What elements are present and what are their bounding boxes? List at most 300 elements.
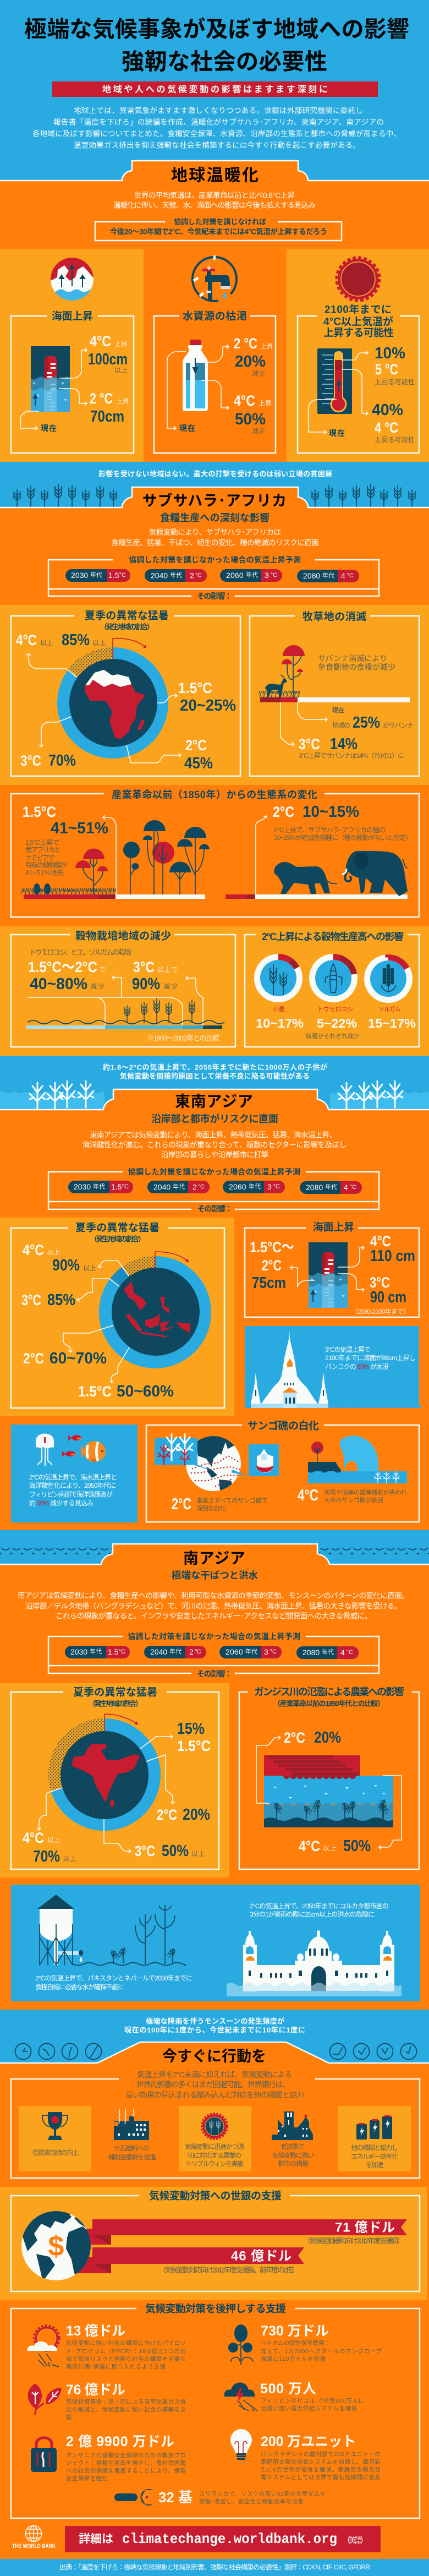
values: 以上 <box>83 1264 96 1272</box>
values <box>21 1242 174 1400</box>
chart: sea level <box>31 346 70 412</box>
item: 76 <box>28 2382 186 2421</box>
pill 2040: 2 °C <box>189 1647 201 1656</box>
values <box>299 706 414 760</box>
Africa intro text <box>111 527 319 547</box>
values: がサバンナ <box>383 721 414 729</box>
text: 世界的影響の多くはまだ回避可能。世界銀行は、 <box>136 2080 290 2089</box>
pill 2030: 1.5°C <box>108 1647 125 1656</box>
values: 以上 <box>63 1855 76 1863</box>
text: plants: 南アフリカと <box>25 845 61 854</box>
text <box>125 2070 304 2099</box>
section heading: Sub-Saharan Africa <box>0 487 429 523</box>
section heading: Southeast Asia <box>0 1089 429 1125</box>
panel: grain area reduction <box>11 929 235 1047</box>
text: 高い効果の見込まれる踏み込んだ対応を他の機関と協力 <box>125 2091 304 2099</box>
text: 2 degrees: 2°C <box>172 1496 191 1513</box>
heading: 牧草地の消滅 <box>302 610 366 623</box>
heading: 2°C上昇による穀物生産高への影響 <box>262 931 404 942</box>
values: 1.5°C <box>177 1738 211 1754</box>
pill 2040 <box>144 1646 206 1658</box>
labels: 10~17% <box>256 1016 304 1030</box>
values: 上回る可能性 <box>375 436 415 444</box>
text: 4 degrees: 大半のサンゴ礁が絶滅 <box>324 1496 383 1504</box>
link banner: （英語） <box>343 2536 368 2545</box>
card: carbon pricing <box>19 2106 91 2171</box>
values: 15% <box>177 1720 205 1738</box>
panel: fisheries <box>11 1425 138 1522</box>
labels: 小麦 <box>273 1006 285 1013</box>
pill 2060: 3 °C <box>267 1182 280 1191</box>
donut: corn <box>309 954 358 1002</box>
pill 2060: 3 °C <box>265 571 277 580</box>
text: フィリピン南部で海洋漁獲高が <box>29 1490 113 1498</box>
text <box>35 1902 389 1991</box>
values: 4°C <box>23 1242 44 1258</box>
values: 70% <box>48 752 76 769</box>
item: 76: 気候投資基金：途上国による温室効果ガス排 <box>66 2398 186 2405</box>
item: 76: 76 億ドル <box>66 2382 125 2398</box>
item: 730: 保護に110万ドルを投資 <box>261 2355 326 2362</box>
text: 食糧自給に必要な水が確保不能に <box>35 1983 124 1991</box>
leaders <box>39 1737 173 1851</box>
values: 70cm <box>90 408 124 425</box>
section heading: Sub-Saharan Africa: サブサハラ･アフリカ <box>142 492 287 509</box>
callout: malnutrition: 気候変動を間接的原因として栄養不良に陥る可能性がある <box>120 1072 310 1080</box>
item: 200: バングラデシュの農村部で200万ユニットの <box>261 2451 381 2458</box>
panel: Ganges flood <box>239 1686 419 1869</box>
callout: no action <box>95 218 342 241</box>
item: 500: 500 万人 <box>260 2381 316 2397</box>
chart: ring <box>99 1252 211 1368</box>
warming text: 世界の平均気温は、産業革命以前と比べ0.8°C上昇 <box>134 190 295 199</box>
text: 海洋酸性化により、2050年代に <box>29 1481 116 1489</box>
text: 2 degrees <box>172 1496 268 1513</box>
heading <box>73 1687 157 1707</box>
text: plants: ナミビアで <box>25 854 55 862</box>
pill 2060: 2060 年代 <box>226 1647 257 1656</box>
leaders <box>290 1248 364 1290</box>
callout: monsoon frequency: 極端な降雨を伴うモンスーンの発生頻度が <box>146 2017 284 2026</box>
heading: 産業革命以前（1850年）からの生態系の変化 <box>112 789 317 800</box>
values: 4°C <box>16 632 37 648</box>
item: 2.99: 安全保障を強化 <box>66 2475 108 2482</box>
text: 4 degrees: 4°C <box>298 1487 318 1504</box>
item: 2.99: ジェクト：食糧生産高を増やし、農村貧困層 <box>66 2459 186 2466</box>
ribbon: 46: （気候変動対応向け2012年度支援額。前年度の2倍） <box>159 2266 299 2274</box>
intro text: 各地域に及ぼす影響についてまとめた。食糧安全保障、水資源、沿岸部の生態系と都市への脅威が高まる中、 <box>32 129 401 138</box>
text: plants <box>25 839 67 877</box>
South Asia intro text: 南アジアは気候変動により、食糧生産への影響や、利用可能な水資源の季節的変動、モンスーンのパターンの変化に直面。 <box>18 1591 409 1600</box>
heading: 夏季の異常な猛暑 <box>85 610 169 622</box>
values: 3°C <box>135 1843 155 1859</box>
values: 上昇 <box>114 340 128 348</box>
values: 110 cm <box>370 1247 415 1265</box>
values: 以上 <box>47 1248 60 1256</box>
section heading: South Asia: 極端な干ばつと洪水 <box>172 1570 258 1581</box>
icon: fish <box>62 1435 106 1463</box>
card: energy efficiency: 他の機関と協力し <box>351 2143 398 2152</box>
South Asia intro text: これらの現象が重なると、インフラや安定したエネルギー･アクセスなど開発面への大きな脅威に。 <box>56 1612 372 1620</box>
values: 85% <box>47 1291 75 1309</box>
values: 100cm <box>88 351 128 368</box>
values: 以上 <box>40 639 53 647</box>
values: 以上 <box>114 367 128 374</box>
chart: ring <box>57 638 168 758</box>
text: 4 degrees <box>298 1487 407 1504</box>
leaders <box>28 978 203 1029</box>
text: 2 degrees: 事実上すべてのサンゴ礁で <box>196 1497 268 1504</box>
illustration: lion and elephant <box>226 851 408 899</box>
values: 50% <box>235 411 266 428</box>
pill 2080: 4 °C <box>341 571 354 580</box>
item: 76: 出の削減と、気候変動に強い社会の構築を支 <box>66 2406 186 2413</box>
text <box>29 1473 117 1507</box>
pill 2060 <box>219 1646 282 1658</box>
labels: ソルガム <box>378 1006 401 1013</box>
text: 気温上昇を2°C未満に抑えれば、気候変動による <box>137 2070 292 2079</box>
ribbon: 71 <box>92 2219 407 2245</box>
leaders <box>280 702 327 744</box>
item: 2.99: への社会的保護を徹底することにより、食糧 <box>66 2467 186 2474</box>
values: 以上 <box>191 1850 205 1858</box>
warming text: 温暖化に伴い、天候、水、海面への影響は今後も拡大する見込み <box>113 201 316 209</box>
forecast timeline: SE Asia: その影響： <box>197 1204 233 1213</box>
values: 2 °C <box>90 390 113 407</box>
link banner: climatechange.worldbank.org <box>122 2531 337 2547</box>
text: plants: 41~51%消失 <box>25 869 64 877</box>
pill 2030 <box>65 569 130 582</box>
intro text: 地球上では、異常気象がますます激しくなりつつある。世銀は外部研究機関に委託し <box>74 106 363 114</box>
values <box>179 335 273 435</box>
logo: The World Bank: THE WORLD BANK <box>12 2543 56 2550</box>
pill 2040: 2 °C <box>193 1182 205 1191</box>
values <box>284 1729 371 1855</box>
heading: サンゴ礁の白化 <box>248 1419 319 1432</box>
card: fossil fuel subsidies: 補助金撤廃を促進 <box>108 2153 156 2161</box>
panel: savanna loss <box>250 610 419 776</box>
text: 3°Cの気温上昇で <box>325 1345 371 1354</box>
intro text: 温室効果ガス排出を抑え強靭な社会を構築するには今すぐ行動を起こす必要がある。 <box>74 141 360 150</box>
item: 200: たに6万世帯が電気を確保。家庭用太陽光発 <box>261 2466 381 2473</box>
pill 2080: 2080 年代 <box>306 1183 337 1192</box>
card: low carbon cities: 低炭素で <box>281 2143 305 2151</box>
footnote: ※1960～2002年との比較 <box>147 1034 219 1043</box>
text: species <box>274 826 412 842</box>
values: 2°C <box>284 1729 305 1746</box>
values: 40% <box>372 401 403 419</box>
panel: sea level SE Asia <box>245 1221 419 1317</box>
icon: globe with dollar <box>21 2211 91 2280</box>
text: サバンナ消滅により <box>318 654 387 663</box>
title: 極端な気候事象が及ぼす地域への影響 <box>24 17 409 42</box>
title <box>24 17 409 74</box>
pill 2030: 2030 年代 <box>74 1182 105 1191</box>
ribbon: 46 <box>92 2247 304 2274</box>
card: triple win: 気候変動に迅速かつ適 <box>185 2142 244 2151</box>
values <box>23 1720 211 1865</box>
labels: トウモロコシ <box>317 1006 353 1013</box>
section heading: 地球温暖化 <box>0 161 429 185</box>
panel: supported programs <box>11 2303 420 2518</box>
forecast timeline: South Asia: その影響： <box>197 1669 232 1678</box>
panel: extreme summer heat Africa <box>11 610 240 776</box>
labels: 収穫がそれぞれ減少 <box>306 1032 359 1040</box>
values: 1.5°C～ <box>250 1239 294 1256</box>
SE Asia intro text: 東南アジアでは気候変動により、海面上昇、熱帯低気圧、猛暑、海水温上昇、 <box>90 1131 337 1139</box>
panel: water tower and Kolkata <box>11 1885 420 2001</box>
item: 13: 気候変動に強い社会の構築に向けたパイロッ <box>66 2339 186 2346</box>
card: fossil fuel subsidies <box>108 2109 156 2161</box>
values: 現在 <box>329 429 345 438</box>
pill 2080: 4 °C <box>344 1183 356 1192</box>
values: 3°C <box>21 1292 41 1308</box>
item: 500 <box>224 2381 364 2412</box>
pill 2030: 2030 年代 <box>70 1647 102 1656</box>
pill 2040: 2040 年代 <box>150 1647 182 1656</box>
icons: clocks <box>15 2043 417 2060</box>
card: low carbon cities: 気候変動に強い <box>272 2151 314 2159</box>
Africa intro text: 食糧生産、猛暑、干ばつ、植生の変化、種の絶滅のリスクに直面 <box>111 538 319 547</box>
values: 50% <box>343 1837 371 1855</box>
panel: crop yield impact <box>245 931 419 1047</box>
text: 2°Cの気温上昇で、海水温上昇と <box>29 1473 117 1481</box>
illustration: coral band <box>0 1081 429 1110</box>
item: 2.99: 2 億 9900 万ドル <box>66 2434 174 2449</box>
text: species: 10~15%が絶滅危惧種に（種の移動がないと想定） <box>274 833 412 842</box>
values: 減少 <box>252 369 265 378</box>
icon: flooded globe <box>51 258 94 301</box>
values: 上昇 <box>260 342 273 350</box>
values: 上昇 <box>258 400 272 407</box>
SE Asia intro text: 海洋酸性化が進む。これらの現象が重なり合って、複数のセクターに影響を及ぼし <box>82 1140 346 1149</box>
forecast timeline: SE Asia <box>48 1167 379 1213</box>
values: 3°C <box>20 752 41 769</box>
item: 13 <box>27 2323 186 2370</box>
panel: Bangkok <box>245 1326 421 1408</box>
heading: 気候変動対策を後押しする支援 <box>145 2303 286 2315</box>
heading: （発生地域の割合） <box>100 623 154 631</box>
text: plants: 特有の植物種が <box>25 861 67 869</box>
South Asia intro text <box>18 1591 409 1620</box>
values <box>329 345 415 444</box>
values: 70% <box>33 1848 60 1865</box>
pill 2080: 2080 年代 <box>303 571 334 580</box>
values: 3°C <box>133 959 155 975</box>
pill 2040: 2 °C <box>190 571 202 580</box>
heading: 4°C以上気温が <box>323 315 393 328</box>
heading: （産業革命以前の1850年代との比較） <box>273 1700 384 1707</box>
leaders <box>309 353 368 432</box>
values <box>16 631 236 772</box>
subtitle banner <box>52 81 378 97</box>
leaders <box>256 1738 402 1847</box>
text: 3分の1が豪雨の際に25cm以上の洪水の危険に <box>250 1910 375 1918</box>
card: low carbon cities <box>272 2111 314 2168</box>
text: バンコクの 69% が水没 <box>325 1362 389 1371</box>
values: 以上 <box>47 1836 61 1844</box>
item: 500: 台風に強い電力供給システムを確保 <box>261 2405 358 2412</box>
item: 13: 13 億ドル <box>66 2323 125 2339</box>
leaders <box>29 653 181 763</box>
pill 2080: 4 °C <box>340 1648 353 1657</box>
values: 85% <box>62 631 90 649</box>
heading <box>75 1222 160 1243</box>
pill 2080 <box>297 570 359 582</box>
item: 32: 修復･改善し、安全性と稼動効率を改善 <box>199 2498 304 2505</box>
heading: 気候変動対策への世銀の支援 <box>149 2190 282 2202</box>
heading <box>85 610 169 631</box>
card: energy efficiency <box>338 2106 411 2171</box>
values: 20% <box>235 353 266 370</box>
intro text: 報告書「温度を下げろ」の続編を作成、温暖化がサブサハラ･アフリカ、東南アジア、南アジアの <box>53 118 384 127</box>
callout: no action: 今後20～30年間で2°C、今世紀末までには4°C気温が上昇するだろう <box>110 227 327 236</box>
values: 現在 <box>332 706 344 714</box>
item: 200: 200 万ユニット <box>261 2434 356 2449</box>
chart: crop strip <box>26 998 224 1029</box>
card: triple win: トリプルウィンを実施 <box>185 2160 244 2168</box>
panel: ecosystem change <box>11 789 419 917</box>
pill 2040: 2040 年代 <box>153 1182 185 1191</box>
pill 2060 <box>220 569 282 582</box>
values: 10~15% <box>302 803 359 821</box>
callout: monsoon frequency: 現在の100年に1度から、今世紀末までに10年に1度に <box>124 2026 305 2034</box>
illustration: Kolkata palace <box>227 1930 402 1996</box>
heading: （発生地域の割合） <box>89 1700 142 1707</box>
pill 2030: 1.5°C <box>108 571 126 580</box>
values: 上昇 <box>116 397 129 405</box>
values: 4°C <box>299 1838 320 1854</box>
values: 20% <box>183 1806 210 1824</box>
card: triple win: 切に対応する農業の <box>188 2152 241 2159</box>
text: 2100年までに海面が88cm上昇し <box>325 1354 416 1362</box>
card: low carbon cities: 都市の構築 <box>278 2159 309 2168</box>
icon: faucet <box>189 254 240 304</box>
item: 200: 電システムとしては世界で最も短期間に普及 <box>261 2474 381 2481</box>
heading: 海面上昇 <box>313 1221 354 1233</box>
heading: （発生地域の割合） <box>90 1235 145 1243</box>
pill 2030 <box>65 1646 130 1658</box>
callout: monsoon frequency <box>124 2017 305 2034</box>
values: 90% <box>132 975 160 993</box>
values: 10% <box>375 345 405 362</box>
callout: malnutrition: 約1.8～2°Cの気温上昇で、2050年までに新たに1000万人の子供が <box>103 1063 327 1071</box>
logo: The World Bank <box>12 2525 56 2550</box>
illustration: savanna tree and gazelle <box>258 645 410 702</box>
values: 減少 <box>252 427 265 435</box>
illustration: forest <box>21 820 210 899</box>
item: 500: フィリピンのビコル で住民500万人に <box>261 2397 364 2404</box>
values: 2°C <box>185 737 207 754</box>
item: 200: 家庭用太陽光発電システムを設置し、毎月新 <box>261 2458 381 2465</box>
item: 13: 開発計画･実施に取り入れるよう支援 <box>66 2363 166 2370</box>
forecast timeline: Africa: その影響： <box>197 592 232 601</box>
forecast timeline: South Asia: 協調した対策を講じなかった場合の気温上昇予測 <box>128 1632 300 1641</box>
values: 2°C <box>273 804 294 820</box>
panel: 4 degree possibility <box>298 258 419 453</box>
values: 4°C <box>90 333 111 350</box>
pill 2080 <box>300 1181 362 1194</box>
item: 2.99: タンザニアの食糧安全保障のための緊急プロ <box>66 2452 186 2459</box>
values: 以上 <box>92 639 106 647</box>
heading: 穀物栽培地域の減少 <box>75 929 171 942</box>
text: トウモロコシ、ヒエ、ソルガムの栽培 <box>29 948 131 957</box>
panel: World Bank support <box>11 2190 420 2291</box>
values: 以上で <box>157 966 178 974</box>
pill 2060: 2060 年代 <box>229 1182 261 1191</box>
heading: ガンジス川の氾濫による農業への影響 <box>254 1686 404 1698</box>
chart: thermometer <box>317 348 352 414</box>
values: 4°C <box>23 1830 44 1846</box>
values: 減少 <box>163 982 178 990</box>
text: 2°Cの気温上昇で、2050年までにコルカタ都市圏の <box>250 1902 389 1910</box>
values: 3°C上昇でサバンナは14%（7分の1）に <box>299 752 404 760</box>
callout: no action: 協調した対策を講じなければ <box>174 218 266 226</box>
heading: 上昇する可能性 <box>323 327 394 339</box>
values: 14% <box>330 735 358 753</box>
values: で <box>99 966 106 974</box>
item: 730 <box>228 2323 382 2365</box>
values <box>250 1233 415 1316</box>
pill 2030 <box>68 1181 133 1193</box>
icon: jellyfish <box>36 1433 54 1466</box>
title: 強靭な社会の必要性 <box>122 49 327 74</box>
values: 50% <box>162 1842 189 1860</box>
labels <box>256 1006 416 1040</box>
forecast timeline: South Asia <box>48 1632 379 1678</box>
panel: coral bleaching <box>146 1419 419 1522</box>
values: 2°C <box>262 1257 282 1274</box>
values: 90% <box>52 1257 80 1274</box>
values: 75cm <box>252 1274 286 1292</box>
chart: bottle <box>183 340 208 411</box>
values <box>23 803 359 837</box>
leaders <box>20 350 87 428</box>
values: 40~80% <box>30 975 87 993</box>
values <box>28 959 178 993</box>
callout: malnutrition <box>103 1063 327 1080</box>
values <box>41 333 129 433</box>
leaders <box>63 1260 129 1383</box>
link banner: 詳細は <box>79 2533 113 2545</box>
card: energy efficiency: エネルギー効率化 <box>351 2153 398 2160</box>
pill 2040 <box>147 1181 210 1193</box>
heading: 海面上昇 <box>52 310 93 323</box>
values: 3°C <box>370 1274 390 1291</box>
forecast timeline: SE Asia: 協調した対策を講じなかった場合の気温上昇予測 <box>128 1167 300 1176</box>
heading: 2100年までに <box>324 303 392 316</box>
source footer: 出典：「温度を下げろ：極端な気候現象と地域別影響、強靭な社会構築の必要性」謝辞：CDKN, CIF, C4C, GFDRR <box>59 2563 370 2571</box>
callout: poorest hit hardest: 影響を受けない地域はない。最大の打撃を受けるのは弱い立場の貧困層 <box>98 470 332 478</box>
values: 2 °C <box>234 335 257 352</box>
pill 2060: 2060 年代 <box>226 571 258 580</box>
pill 2080 <box>296 1646 359 1659</box>
text <box>325 1345 416 1371</box>
illustration: flood <box>264 1755 393 1827</box>
pill 2040 <box>145 569 207 582</box>
values: 現在 <box>179 424 195 433</box>
heading <box>323 303 394 339</box>
item: 32: 32 基 <box>158 2489 193 2506</box>
icons: wheat row <box>14 484 415 507</box>
values: 現在 <box>41 424 57 433</box>
section heading: Southeast Asia: 沿岸部と都市がリスクに直面 <box>151 1113 278 1125</box>
illustration: wave <box>308 1436 407 1483</box>
values: 減少 <box>90 982 105 990</box>
chart: ring <box>48 1714 161 1831</box>
text: species: 2°C上昇で、サブサハラ･アフリカの種の <box>274 826 386 834</box>
values: 2°C <box>157 1807 177 1823</box>
